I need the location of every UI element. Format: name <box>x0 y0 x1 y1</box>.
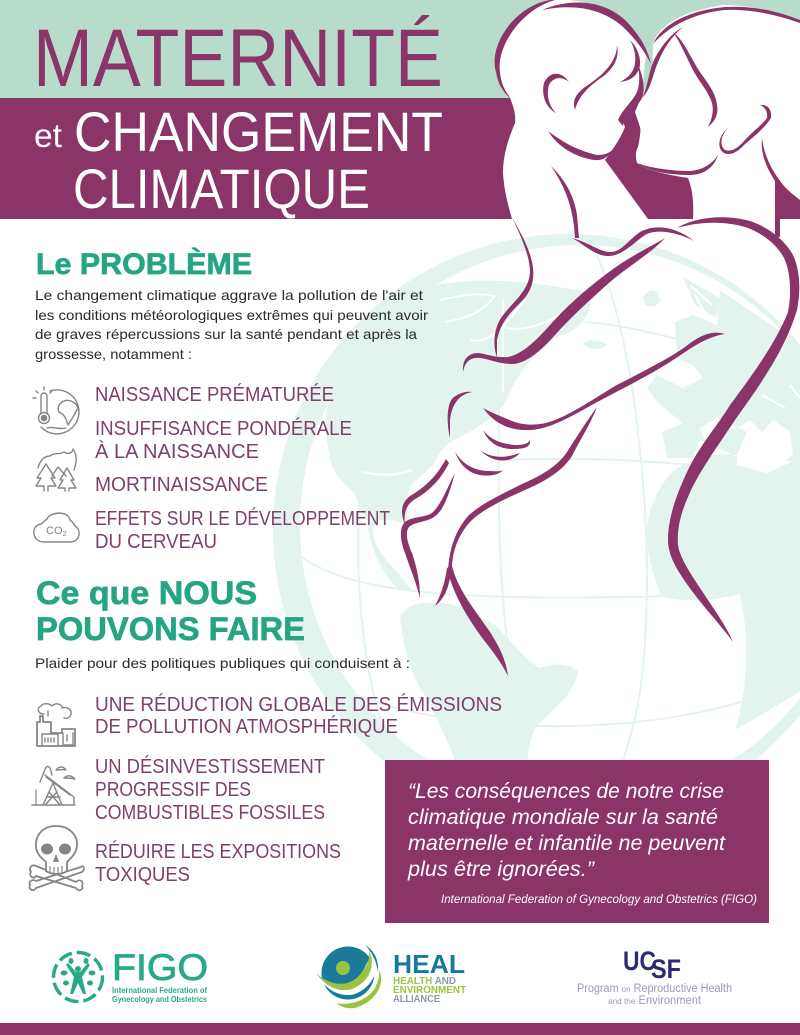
list item: UN DÉSINVESTISSEMENT: PROGRESSIF DES <box>95 778 251 801</box>
HEAL emblem <box>316 945 381 1008</box>
FIGO full name <box>112 985 207 1004</box>
logo: FIGO <box>54 947 208 1004</box>
Mediterranean <box>700 418 793 473</box>
UCSF program name <box>577 983 732 1007</box>
quote text: climatique mondiale sur la santé <box>408 806 718 829</box>
paragraph: advocacy intro: Plaider pour des politiques publiques qui conduisent à : <box>35 655 410 671</box>
title: CHANGEMENT: CHANGEMENT <box>74 100 443 163</box>
purple contour lines <box>401 0 800 676</box>
logo: HEAL <box>316 945 467 1008</box>
list item: RÉDUIRE LES EXPOSITIONS: RÉDUIRE LES EXPOSITIONS <box>95 840 341 863</box>
section heading: Ce que NOUS POUVONS FAIRE <box>36 575 305 647</box>
quote text <box>407 780 726 881</box>
quote attribution: International Federation of Gynecology and Obstetrics (FIGO) <box>441 892 757 906</box>
continent: Africa <box>647 454 800 730</box>
section heading: Ce que NOUS POUVONS FAIRE: POUVONS FAIRE <box>36 611 305 647</box>
baby fill <box>496 0 648 219</box>
FIGO wordmark: FIGO <box>112 947 208 988</box>
icon: thermometer and globe <box>33 387 79 434</box>
quote text: maternelle et infantile ne peuvent <box>408 832 726 855</box>
list item: EFFETS SUR LE DÉVELOPPEMENT <box>95 507 390 553</box>
icon: CO2 cloud <box>34 513 79 542</box>
icon: CO2 cloud: 2 <box>62 529 67 538</box>
section heading: Ce que NOUS POUVONS FAIRE: Ce que NOUS <box>36 575 257 611</box>
header band: purple <box>0 98 800 219</box>
list item: NAISSANCE PRÉMATURÉE: NAISSANCE PRÉMATURÉE <box>95 383 334 406</box>
callout: quote box <box>385 760 769 923</box>
list item: MORTINAISSANCE: MORTINAISSANCE <box>95 473 268 496</box>
UCSF program name: Program on Reproductive Health <box>577 983 732 995</box>
icon: forest fire <box>36 449 76 491</box>
list item: UNE RÉDUCTION GLOBALE: UNE RÉDUCTION GLOBALE DES ÉMISSIONS <box>95 693 502 716</box>
section heading: Le PROBLÈME: Le PROBLÈME <box>36 247 252 281</box>
icon: factory <box>37 704 75 746</box>
paragraph: problem description: de graves répercussions sur la santé pendant et après la <box>35 326 417 342</box>
list item: RÉDUIRE LES EXPOSITIONS: TOXIQUES <box>95 863 190 886</box>
islands <box>583 277 720 349</box>
HEAL full name <box>393 975 467 1005</box>
UCSF wordmark: UC <box>623 946 656 976</box>
UCSF wordmark: SF <box>651 954 681 984</box>
paragraph: problem description: grossesse, notamment : <box>35 346 192 362</box>
paragraph: problem description <box>35 287 428 362</box>
footer bar <box>0 1023 800 1035</box>
list item: INSUFFISANCE PONDÉRALE <box>95 417 352 463</box>
list item: INSUFFISANCE PONDÉRALE: À LA NAISSANCE <box>95 440 259 463</box>
quote text: plus être ignorées.” <box>407 858 595 881</box>
list item: UN DÉSINVESTISSEMENT <box>95 755 325 824</box>
list item: UN DÉSINVESTISSEMENT: COMBUSTIBLES FOSSILES <box>95 801 325 824</box>
title: et: et <box>34 117 62 154</box>
icon: CO2 cloud: CO <box>46 525 62 537</box>
list item: EFFETS SUR LE DÉVELOPPEMENT: DU CERVEAU <box>95 530 217 553</box>
list item: UNE RÉDUCTION GLOBALE: DE POLLUTION ATMOSPHÉRIQUE <box>95 715 398 738</box>
icon: skull and crossbones <box>30 826 84 890</box>
list item: UN DÉSINVESTISSEMENT: UN DÉSINVESTISSEMENT <box>95 755 325 778</box>
quote text: “Les conséquences de notre crise <box>408 780 724 803</box>
mother fill <box>635 5 800 219</box>
paragraph: problem description: Le changement climatique aggrave la pollution de l'air et <box>35 287 423 303</box>
icon: oil pumpjack <box>32 766 75 805</box>
paragraph: problem description: les conditions météorologiques extrêmes qui peuvent avoir <box>35 307 428 323</box>
HEAL full name: ENVIRONMENT <box>393 984 467 996</box>
title: CLIMATIQUE: CLIMATIQUE <box>73 157 370 220</box>
logo: UCSF program <box>577 946 732 1007</box>
HEAL wordmark: HEAL <box>393 949 465 979</box>
list item: UNE RÉDUCTION GLOBALE <box>95 693 502 738</box>
mother and baby silhouette <box>401 0 800 676</box>
continent: North America <box>326 280 592 590</box>
continent: Europe and Asia <box>647 290 800 462</box>
list item: RÉDUIRE LES EXPOSITIONS <box>95 840 341 886</box>
globe background <box>273 234 800 826</box>
UCSF wordmark <box>623 946 681 984</box>
list item: INSUFFISANCE PONDÉRALE: INSUFFISANCE PONDÉRALE <box>95 417 352 440</box>
globe grid <box>288 255 800 790</box>
globe ring <box>273 234 800 826</box>
FIGO full name: Gynecology and Obstetrics <box>112 994 207 1004</box>
continent: South America <box>400 603 578 770</box>
HEAL full name: ALLIANCE <box>393 993 440 1005</box>
HEAL full name: HEALTH AND <box>393 975 456 987</box>
land cracks and white grid segments <box>363 285 800 475</box>
header band: mint <box>0 0 800 98</box>
title: MATERNITÉ: MATERNITÉ <box>33 13 443 104</box>
UCSF program name: and the Environment <box>608 995 702 1007</box>
list item: EFFETS SUR LE DÉVELOPPEMENT: EFFETS SUR LE DÉVELOPPEMENT <box>95 507 390 530</box>
FIGO full name: International Federation of <box>112 985 207 995</box>
FIGO emblem <box>54 952 102 1002</box>
